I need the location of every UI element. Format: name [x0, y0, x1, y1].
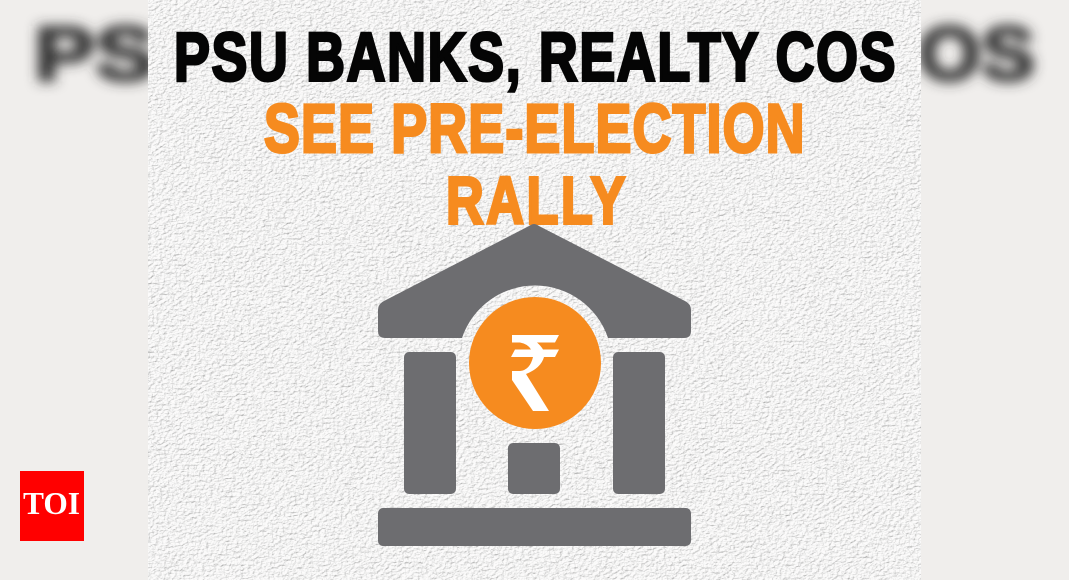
orange coin — [469, 297, 601, 429]
base — [378, 508, 691, 546]
blurred background heading, right: OS — [918, 12, 1035, 97]
right column — [613, 352, 665, 494]
icon: rupee symbol — [511, 335, 559, 411]
icon: bank building with rupee — [378, 224, 691, 546]
left column — [404, 352, 456, 494]
door — [508, 443, 560, 494]
heading line 2: SEE PRE-ELECTION — [264, 91, 805, 168]
blurred background heading, left: PS — [34, 12, 156, 97]
heading line 3: RALLY — [446, 163, 625, 238]
roof — [378, 224, 691, 338]
logo: TOI: TOI — [23, 485, 80, 521]
heading line 1: PSU BANKS, REALTY COS — [174, 19, 895, 96]
panel: textured paper — [148, 0, 921, 580]
logo: TOI — [20, 471, 84, 541]
